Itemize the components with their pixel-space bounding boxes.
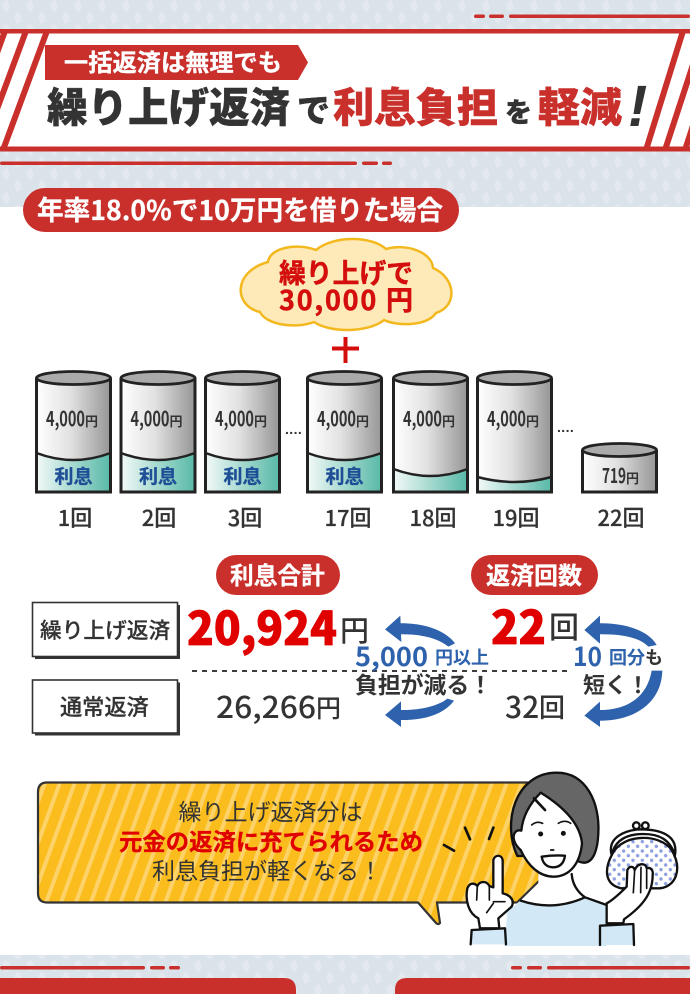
banner ribbon: 一括返済は無理でも xyxy=(64,43,282,78)
speech bubble text: 利息負担が軽くなる！ xyxy=(152,852,382,886)
bottom patterned background xyxy=(0,955,690,994)
value: normal count: 回 xyxy=(539,688,565,725)
cylinder: payment 18 xyxy=(394,372,468,492)
payment number labels xyxy=(58,501,645,533)
cylinder: payment 2: 4,000 xyxy=(130,403,170,432)
sparks xyxy=(444,828,493,851)
pill: number of payments xyxy=(471,555,598,595)
row label: prepayment: 繰り上げ返済 xyxy=(40,614,170,645)
value: prepayment interest: 20,924 xyxy=(187,593,337,659)
cylinder: payment 19: 4,000 xyxy=(487,403,526,432)
hair xyxy=(511,773,598,863)
cylinder: payment 18: 円 xyxy=(442,411,455,430)
row label: normal repayment xyxy=(32,680,180,736)
cylinder: payment 1: 円 xyxy=(85,411,98,430)
title: ! xyxy=(628,74,647,139)
cylinder: payment 2: 利息 xyxy=(139,462,177,489)
header bottom accent line xyxy=(0,162,392,165)
cloud callout: 30,000 円 xyxy=(279,279,413,318)
cylinder: payment 3 xyxy=(206,372,280,492)
coin purse xyxy=(607,822,677,888)
cylinder: payment 2 xyxy=(121,372,195,492)
row label: normal repayment: 通常返済 xyxy=(60,690,149,722)
cylinder: payment 19: 円 xyxy=(526,411,539,430)
title: で xyxy=(297,84,330,132)
pill: total interest xyxy=(216,555,340,595)
hand holding purse xyxy=(600,864,653,945)
payment number labels: 2回 xyxy=(142,501,176,533)
cylinder: payment 17: 利息 xyxy=(326,462,364,489)
callout: interest savings xyxy=(355,637,492,700)
illustration: woman with coin purse xyxy=(444,773,677,946)
title: 利息負担 xyxy=(333,74,498,134)
payment number labels: 1回 xyxy=(58,501,92,533)
face xyxy=(514,793,582,877)
speech bubble xyxy=(38,782,540,924)
cylinder: payment 3: 円 xyxy=(254,411,267,430)
top patterned background xyxy=(0,0,690,207)
shoulders and neck xyxy=(505,873,607,946)
value: prepayment count: 回 xyxy=(549,603,579,647)
cylinder: payment 17: 円 xyxy=(356,411,369,430)
cylinder: payment 22 xyxy=(582,444,656,492)
row divider xyxy=(192,670,570,672)
title: 軽減 xyxy=(538,74,622,134)
cylinder: payment 1 xyxy=(36,372,110,492)
payment number labels: 22回 xyxy=(597,501,645,533)
callout: fewer payments: も xyxy=(645,644,663,670)
header banner xyxy=(0,29,690,152)
callout: fewer payments: 回分 xyxy=(609,644,645,670)
cloud callout: 繰り上げで xyxy=(279,252,413,291)
payment number labels: 19回 xyxy=(492,501,540,533)
pointing hand xyxy=(467,856,513,944)
title xyxy=(47,74,647,139)
plus sign xyxy=(332,337,359,363)
ellipsis after payment 3: .... xyxy=(285,421,302,437)
cylinder: payment 3: 4,000 xyxy=(215,403,254,432)
cylinder: payment 3: 利息 xyxy=(224,462,262,489)
cylinder: payment 1: 利息 xyxy=(54,462,93,489)
value: normal count: 32 xyxy=(505,683,539,727)
blouse xyxy=(504,897,607,946)
value: prepayment count xyxy=(491,592,579,658)
cylinder: payment 17 xyxy=(308,372,382,492)
footer accent lines xyxy=(0,966,690,970)
speech bubble text: 元金の返済に充てられるため xyxy=(119,823,423,857)
facial features xyxy=(532,821,571,867)
value: prepayment interest: 円 xyxy=(340,608,369,650)
cylinder: payment 22: 円 xyxy=(626,468,639,487)
callout: interest savings: 円以上 xyxy=(435,644,489,670)
pill: number of payments: 返済回数 xyxy=(486,556,582,591)
pill: total interest: 利息合計 xyxy=(230,557,325,591)
value: normal interest: 26,266 xyxy=(216,683,316,727)
title: 繰り上げ返済 xyxy=(47,74,290,134)
payment number labels: 3回 xyxy=(228,501,262,533)
ellipsis after payment 19: .... xyxy=(557,419,574,435)
speech bubble text: 繰り上げ返済分は xyxy=(178,793,362,827)
header top accent line xyxy=(474,14,690,18)
value: prepayment count: 22 xyxy=(491,592,546,658)
cylinder: payment 1: 4,000 xyxy=(46,403,85,432)
cloud callout xyxy=(241,239,451,330)
speech bubble text xyxy=(119,793,423,886)
payment number labels: 17回 xyxy=(324,501,372,533)
cylinder: payment 19 xyxy=(478,372,552,492)
callout: fewer payments: 短く！ xyxy=(583,668,649,700)
footer red bars xyxy=(0,978,690,994)
title: を xyxy=(505,91,532,130)
value: normal interest: 円 xyxy=(316,689,341,725)
cylinder: payment 18: 4,000 xyxy=(403,403,442,432)
callout: fewer payments: 10 xyxy=(573,637,602,674)
condition pill: 年率18.0%で10万円を借りた場合 xyxy=(37,189,443,228)
callout: interest savings: 5,000 xyxy=(355,637,428,674)
callout: fewer payments xyxy=(573,637,663,700)
callout: interest savings: 負担が減る！ xyxy=(355,666,492,700)
cylinder: payment 22: 719 xyxy=(602,460,626,489)
payment number labels: 18回 xyxy=(409,501,457,533)
row label: prepayment xyxy=(32,602,180,659)
arrows xyxy=(385,616,662,727)
cylinder: payment 2: 円 xyxy=(170,411,183,430)
cylinder: payment 17: 4,000 xyxy=(317,403,356,432)
value: normal count xyxy=(505,683,565,727)
